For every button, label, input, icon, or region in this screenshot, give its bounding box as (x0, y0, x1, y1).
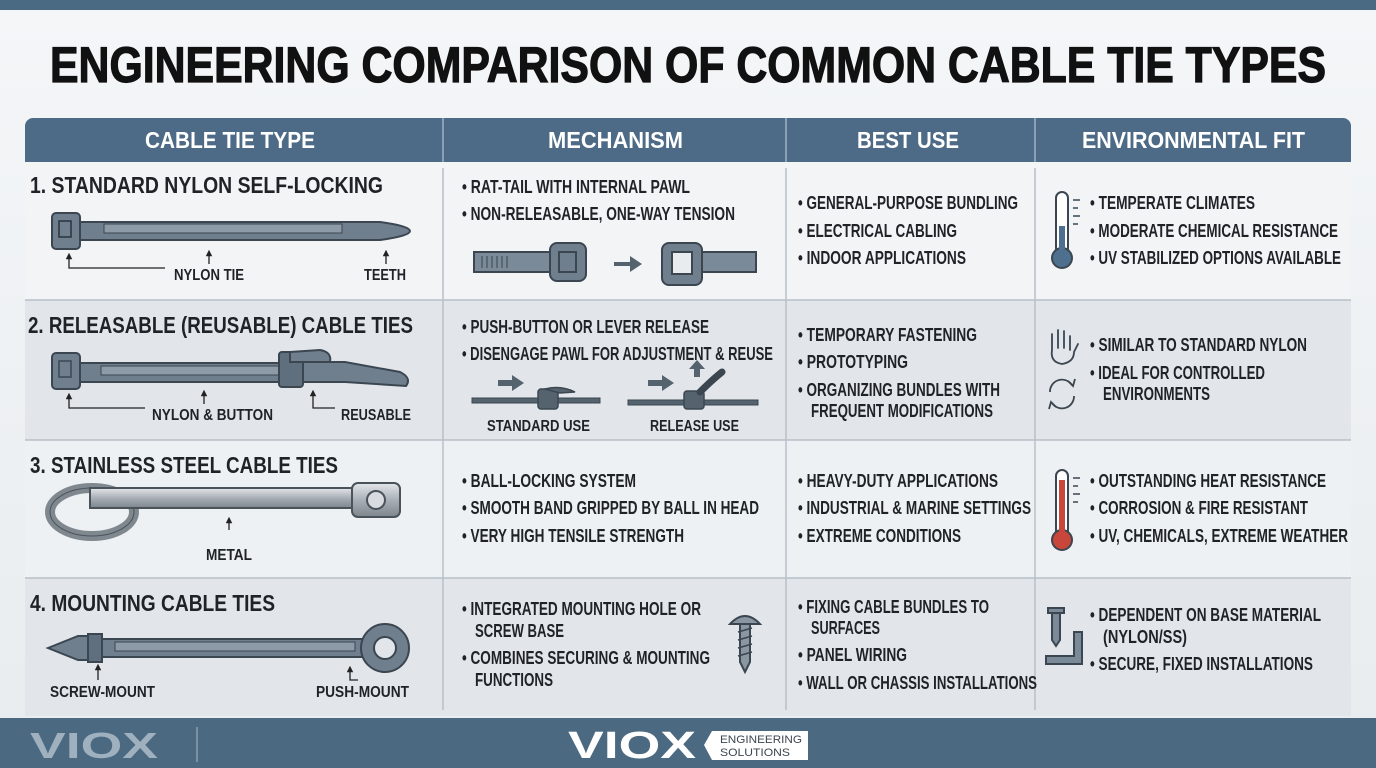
illustration: mounting tie (48, 624, 409, 680)
row 4: PUSH-MOUNT (316, 684, 409, 701)
mechanism 2: • PUSH-BUTTON OR LEVER RELEASE (462, 317, 709, 337)
mechanism 1: • RAT-TAIL WITH INTERNAL PAWL (462, 177, 690, 197)
row 4 (30, 590, 1321, 701)
best use 3: • INDUSTRIAL & MARINE SETTINGS (798, 498, 1031, 518)
best use 2: • ORGANIZING BUNDLES WITH (798, 380, 1000, 400)
header bar: CABLE TIE TYPE (145, 127, 315, 153)
row title 2: 2. RELEASABLE (REUSABLE) CABLE TIES (28, 312, 413, 338)
illustration: releasable tie (52, 350, 408, 408)
mechanism 3: • SMOOTH BAND GRIPPED BY BALL IN HEAD (462, 498, 759, 518)
mechanism 1 (462, 177, 756, 285)
env fit 1: • TEMPERATE CLIMATES (1090, 193, 1255, 213)
best use 3: • EXTREME CONDITIONS (798, 526, 961, 546)
row title 4: 4. MOUNTING CABLE TIES (30, 590, 275, 616)
footer logo center (568, 725, 808, 767)
mechanism 2: RELEASE USE (650, 418, 739, 435)
mechanism 4 (462, 599, 760, 690)
header bar: ENVIRONMENTAL FIT (1082, 127, 1305, 153)
footer logo center: ENGINEERING (720, 734, 802, 746)
mechanism 4: FUNCTIONS (475, 670, 553, 690)
env fit 2: • IDEAL FOR CONTROLLED (1090, 363, 1265, 383)
row 1 (30, 172, 1341, 285)
mechanism 2 (462, 317, 773, 435)
best use 4: • PANEL WIRING (798, 645, 907, 665)
best use 1: • INDOOR APPLICATIONS (798, 248, 966, 268)
mechanism 3: • VERY HIGH TENSILE STRENGTH (462, 526, 684, 546)
mechanism 2: • DISENGAGE PAWL FOR ADJUSTMENT & REUSE (462, 344, 773, 364)
footer logo left: VIOX (30, 725, 158, 766)
icon: hand (1052, 330, 1078, 364)
env fit 2 (1049, 330, 1307, 409)
header bar: BEST USE (857, 127, 959, 153)
mechanism 3: • BALL-LOCKING SYSTEM (462, 471, 636, 491)
best use 3 (798, 471, 1031, 546)
mechanism 2: STANDARD USE (487, 418, 590, 435)
best use 3: • HEAVY-DUTY APPLICATIONS (798, 471, 998, 491)
env fit 1 (1052, 192, 1341, 268)
icon: bracket with screw (1046, 608, 1082, 664)
mechanism 4: • COMBINES SECURING & MOUNTING (462, 648, 710, 668)
row 3: METAL (206, 547, 252, 564)
best use 4: • WALL OR CHASSIS INSTALLATIONS (798, 673, 1037, 693)
mechanism 3 (462, 471, 759, 546)
icon: thermometer blue (1052, 192, 1080, 268)
illustration: standard nylon tie: NYLON TIE (174, 267, 244, 284)
illustration: standard nylon tie (52, 213, 410, 284)
header bar: MECHANISM (548, 127, 683, 153)
best use 1: • GENERAL-PURPOSE BUNDLING (798, 193, 1018, 213)
row title 3: 3. STAINLESS STEEL CABLE TIES (30, 452, 338, 478)
env fit 2: ENVIRONMENTS (1103, 384, 1210, 404)
mechanism 1: • NON-RELEASABLE, ONE-WAY TENSION (462, 204, 735, 224)
env fit 4 (1046, 605, 1321, 674)
illustration: stainless steel tie (50, 483, 400, 536)
env fit 2: • SIMILAR TO STANDARD NYLON (1090, 335, 1307, 355)
best use 2: • TEMPORARY FASTENING (798, 325, 977, 345)
icon: screw (730, 616, 760, 672)
env fit 3 (1052, 470, 1348, 550)
illustration: standard nylon tie: TEETH (364, 267, 406, 284)
footer logo center: SOLUTIONS (720, 747, 790, 759)
best use 4: SURFACES (811, 618, 880, 638)
header bar (25, 118, 1351, 162)
row title 1: 1. STANDARD NYLON SELF-LOCKING (30, 172, 383, 198)
table (25, 118, 1351, 716)
env fit 4: (NYLON/SS) (1103, 627, 1187, 647)
best use 2: • PROTOTYPING (798, 352, 908, 372)
best use 1: • ELECTRICAL CABLING (798, 221, 957, 241)
icon: pawl diagram (474, 243, 756, 285)
env fit 3: • CORROSION & FIRE RESISTANT (1090, 498, 1308, 518)
icon: standard vs release use (472, 360, 758, 409)
mechanism 4: • INTEGRATED MOUNTING HOLE OR (462, 599, 701, 619)
best use 1 (798, 193, 1018, 268)
best use 4: • FIXING CABLE BUNDLES TO (798, 597, 989, 617)
footer (0, 718, 1376, 768)
icon: thermometer red (1052, 470, 1080, 550)
best use 2 (798, 325, 1000, 421)
row 2: REUSABLE (341, 407, 411, 424)
icon: refresh (1049, 379, 1075, 409)
row 2: NYLON & BUTTON (152, 407, 273, 424)
mechanism 4: SCREW BASE (475, 621, 564, 641)
row 4: SCREW-MOUNT (50, 684, 155, 701)
row 3 (30, 452, 1348, 564)
best use 4 (798, 597, 1037, 693)
footer logo center: VIOX (568, 725, 697, 767)
top stripe (0, 0, 1376, 10)
row 2 (28, 312, 1307, 435)
best use 2: FREQUENT MODIFICATIONS (811, 401, 993, 421)
